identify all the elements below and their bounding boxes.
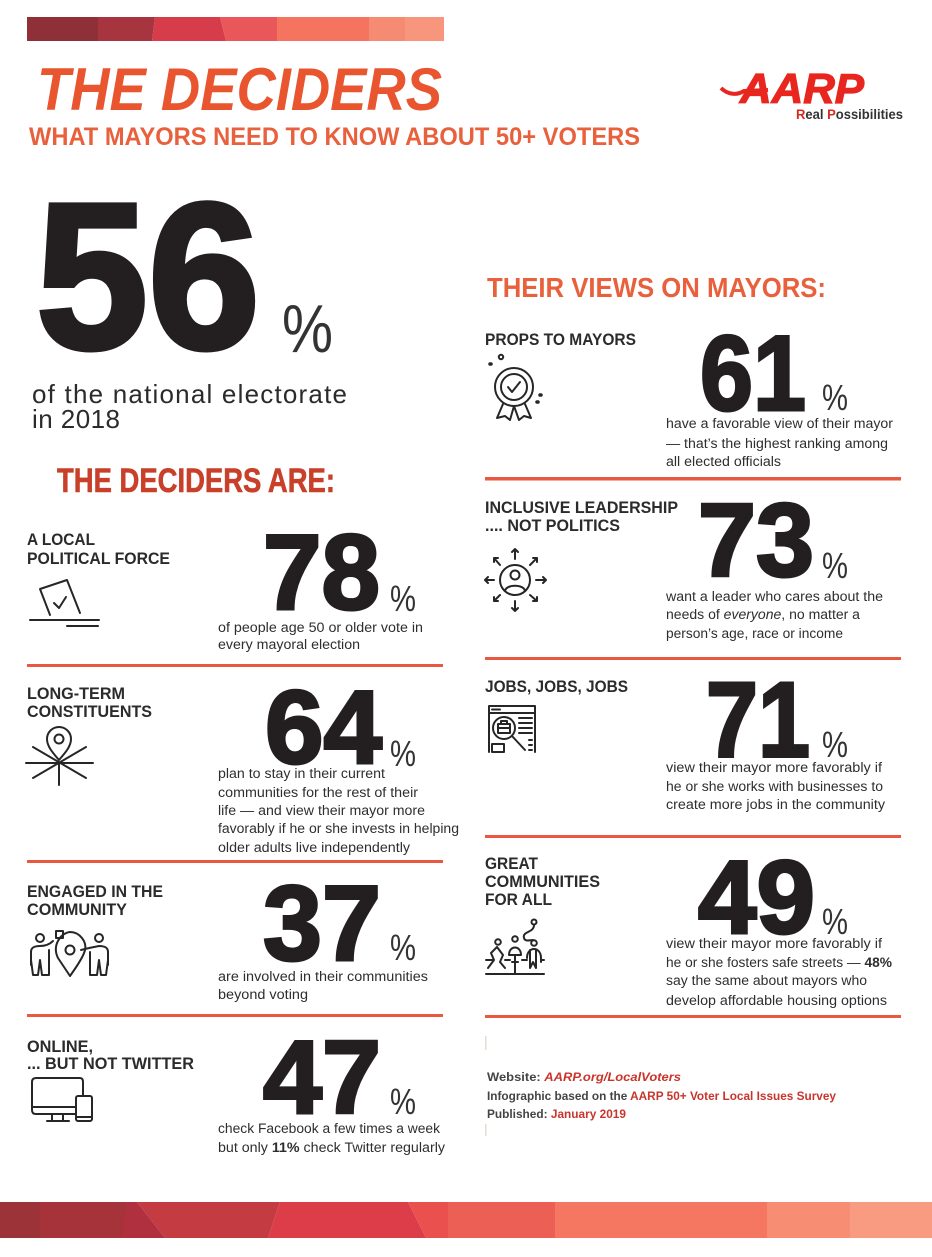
panel: local political force: 78 [263, 512, 380, 632]
panel: long-term constituents: older adults live independently [218, 840, 410, 855]
panel: online but not twitter: but only 11% check Twitter regularly [218, 1140, 445, 1155]
panel: local political force: A LOCAL [27, 531, 95, 549]
panel: great communities: % [822, 901, 848, 942]
panel: long-term constituents: CONSTITUENTS [27, 703, 152, 721]
panel: engaged in the community [27, 863, 428, 1002]
footer source notes: Website: AARP.org/LocalVoters [487, 1070, 681, 1084]
icon: people on a route [486, 920, 544, 974]
footer source notes [487, 1070, 836, 1121]
panel: online but not twitter: ... BUT NOT TWITTER [27, 1055, 194, 1073]
panel: engaged in the community: 37 [263, 863, 381, 983]
big stat: 56 percent: % [282, 291, 333, 367]
panel: great communities: FOR ALL [485, 891, 552, 909]
panel: long-term constituents: LONG-TERM [27, 685, 125, 703]
panel: engaged in the community: are involved in their communities [218, 969, 428, 984]
subtitle: WHAT MAYORS NEED TO KNOW ABOUT 50+ VOTERS [29, 123, 640, 151]
panel: long-term constituents [26, 670, 459, 855]
panel: props to mayors [485, 313, 894, 469]
panel: engaged in the community: beyond voting [218, 987, 308, 1002]
panel: inclusive leadership: want a leader who cares about the [665, 589, 883, 604]
icon: rosette [490, 355, 541, 420]
panel: inclusive leadership: 73 [698, 483, 814, 599]
panel: great communities: develop affordable housing options [666, 993, 887, 1008]
panel: inclusive leadership: % [822, 545, 848, 586]
panel: inclusive leadership: person’s age, race or income [666, 626, 843, 641]
heading: the deciders are: THE DECIDERS ARE: [57, 462, 335, 500]
panel: online but not twitter [27, 1020, 445, 1155]
icon: monitor and phone [32, 1078, 92, 1121]
icon: job search window [489, 706, 535, 752]
icon: person with arrows [485, 549, 546, 611]
panel: props to mayors: 61 [700, 313, 806, 433]
panel: props to mayors: % [822, 377, 848, 418]
panel: props to mayors: have a favorable view of their mayor [666, 416, 894, 431]
panel: jobs: view their mayor more favorably if [666, 760, 882, 775]
panel: jobs: JOBS, JOBS, JOBS [485, 678, 628, 696]
big stat: 56 percent: 56 [36, 161, 260, 393]
panel: jobs: % [822, 724, 848, 765]
bottom gradient bar [0, 1202, 932, 1238]
panel: online but not twitter: % [390, 1081, 416, 1122]
panel: props to mayors: — that’s the highest ranking among [666, 436, 888, 451]
icon: ballot [30, 580, 99, 626]
panel: inclusive leadership [485, 483, 883, 641]
panel: great communities: 49 [698, 840, 815, 956]
footer source notes: Infographic based on the AARP 50+ Voter Local Issues Survey [487, 1089, 836, 1103]
panel: inclusive leadership: needs of everyone, no matter a [666, 607, 860, 622]
footer source notes: Published: January 2019 [487, 1107, 626, 1121]
panel: local political force: % [390, 578, 416, 619]
panel: jobs: 71 [706, 660, 810, 780]
panel: long-term constituents: plan to stay in their current [218, 766, 385, 781]
panel: local political force: of people age 50 or older vote in [218, 620, 423, 635]
panel: jobs: he or she works with businesses to [666, 779, 883, 794]
panel: online but not twitter: check Facebook a few times a week [218, 1121, 440, 1136]
AARP logo: AARP [739, 65, 865, 112]
panel: long-term constituents: 64 [265, 670, 382, 786]
panel: long-term constituents: life — and view their mayor more [218, 803, 425, 818]
panel: jobs [485, 660, 885, 812]
AARP logo [721, 65, 903, 122]
panel: local political force: every mayoral election [218, 637, 360, 652]
big stat caption: of the national electorate [32, 379, 347, 409]
panel: great communities: GREAT [485, 855, 538, 873]
panel: long-term constituents: favorably if he or she invests in helping [218, 821, 459, 836]
panel: local political force: POLITICAL FORCE [27, 550, 170, 568]
panel: long-term constituents: % [390, 733, 416, 774]
icon: people and pin [31, 931, 108, 976]
top gradient bar [27, 17, 444, 41]
panel: jobs: create more jobs in the community [666, 797, 885, 812]
panel: engaged in the community: COMMUNITY [27, 901, 127, 919]
panel: inclusive leadership: INCLUSIVE LEADERSHIP [485, 499, 678, 517]
big stat caption: in 2018 [32, 404, 120, 434]
panel: engaged in the community: % [390, 927, 416, 968]
panel: great communities: view their mayor more favorably if [666, 936, 882, 951]
panel: great communities: say the same about mayors who [666, 973, 867, 988]
heading: their views on mayors: THEIR VIEWS ON MAYORS: [487, 272, 826, 303]
panel: long-term constituents: communities for the rest of their [218, 785, 419, 800]
panel: inclusive leadership: .... NOT POLITICS [485, 517, 620, 535]
panel: online but not twitter: 47 [263, 1020, 381, 1136]
panel: local political force [27, 512, 423, 652]
AARP logo: Real Possibilities [796, 107, 903, 122]
panel: great communities [485, 840, 892, 1008]
panel: great communities: COMMUNITIES [485, 873, 600, 891]
panel: great communities: he or she fosters safe streets — 48% [666, 955, 892, 970]
icon: location pin [26, 727, 93, 785]
panel: engaged in the community: ENGAGED IN THE [27, 883, 163, 901]
title: THE DECIDERS [37, 56, 442, 123]
panel: props to mayors: PROPS TO MAYORS [485, 331, 636, 349]
big stat caption [32, 379, 347, 434]
panel: online but not twitter: ONLINE, [27, 1038, 93, 1056]
panel: props to mayors: all elected officials [666, 454, 781, 469]
